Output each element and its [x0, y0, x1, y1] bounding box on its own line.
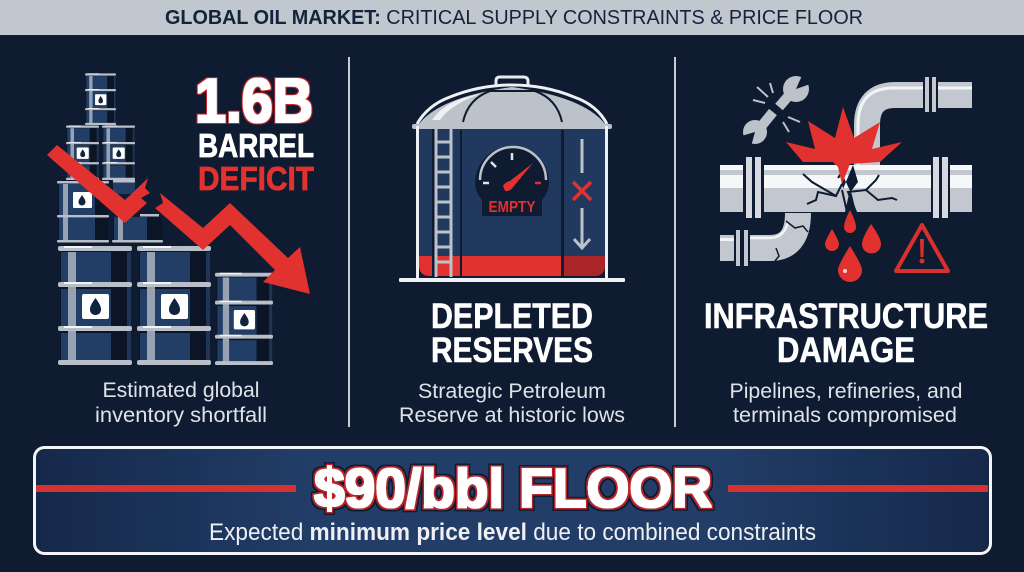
description: Estimated global: [102, 379, 260, 402]
heading: DEPLETED: [431, 297, 593, 336]
lower pipe: [720, 213, 798, 248]
cracks: [803, 165, 897, 212]
panel: infrastructure damage: [704, 71, 988, 427]
burst: [786, 107, 902, 184]
panel: barrel deficit: [47, 67, 314, 427]
price caption: Expected minimum price level due to combined constraints: [209, 519, 816, 546]
description: Reserve at historic lows: [399, 404, 625, 427]
down arrow with cross: [574, 139, 590, 248]
price headline: $90/bbl FLOOR: [314, 457, 712, 519]
icon: barrel stack: [57, 73, 273, 365]
main pipe: [720, 165, 972, 212]
header bar: [0, 0, 1024, 35]
broken wrench: [738, 71, 816, 150]
description: Strategic Petroleum: [418, 380, 606, 403]
red rule right: [728, 485, 988, 492]
heading: INFRASTRUCTURE: [704, 297, 988, 336]
stat: 1.6B: 1.6B: [195, 67, 313, 136]
gauge: [475, 146, 549, 216]
red rule left: [36, 485, 296, 492]
divider right: [674, 57, 676, 427]
ladder: [436, 127, 451, 277]
label: barrel: BARREL: [198, 127, 314, 164]
warning triangle: [896, 225, 948, 271]
icon: falling red arrow: [47, 145, 310, 294]
icon: storage tank: [399, 77, 625, 282]
banner: price floor: [34, 448, 990, 554]
gauge label: EMPTY: [488, 199, 536, 216]
divider left: [348, 57, 350, 427]
heading: RESERVES: [431, 331, 593, 370]
description: inventory shortfall: [95, 404, 267, 427]
header title: GLOBAL OIL MARKET: CRITICAL SUPPLY CONSTRAINTS & PRICE FLOOR: [165, 7, 863, 29]
description: Pipelines, refineries, and: [730, 380, 962, 403]
label: deficit: DEFICIT: [198, 160, 314, 197]
upper pipe: [867, 95, 972, 165]
heading: DAMAGE: [777, 331, 915, 370]
description: terminals compromised: [733, 404, 957, 427]
icon: broken pipeline: [720, 71, 972, 282]
panel: depleted reserves: [399, 77, 625, 427]
oil drops: [825, 210, 881, 282]
